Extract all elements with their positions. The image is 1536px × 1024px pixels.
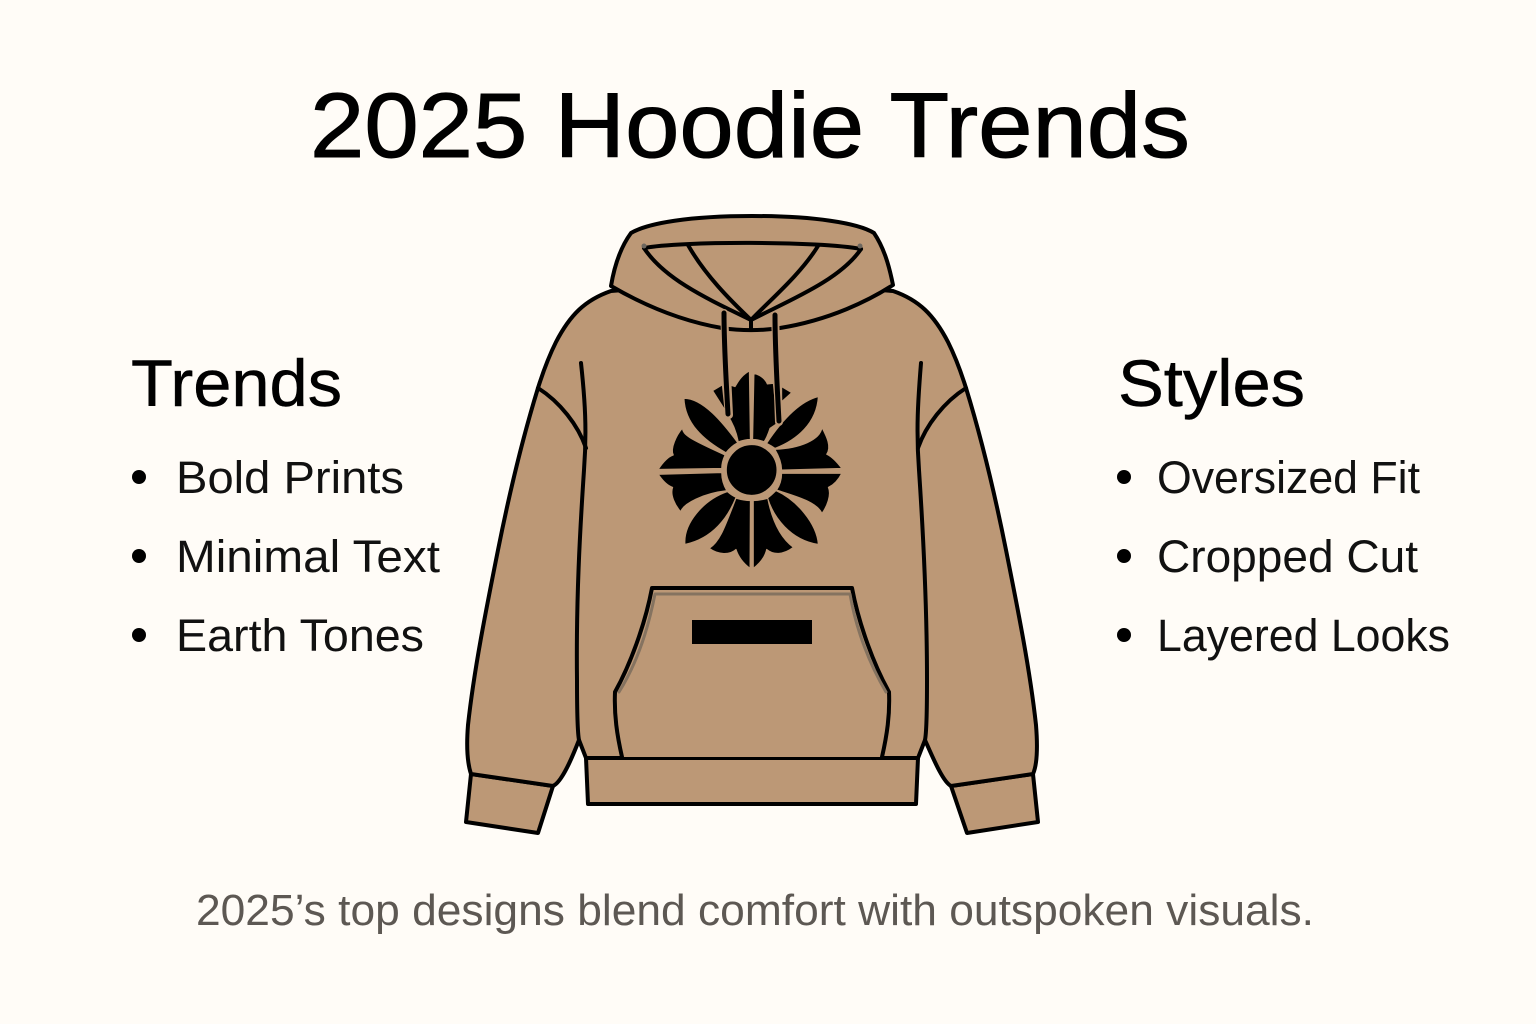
heading: trends: Trends xyxy=(131,346,342,420)
list item: layered looks: Layered Looks xyxy=(1157,610,1450,661)
hoodie illustration xyxy=(466,216,1038,833)
hood xyxy=(611,216,893,330)
list item: bold prints: Bold Prints xyxy=(176,452,404,503)
list item: earth tones: Earth Tones xyxy=(176,610,424,661)
caption: 2025’s top designs blend comfort with outspoken visuals. xyxy=(196,886,1314,935)
drawstring right xyxy=(775,315,779,422)
hood eyelet right xyxy=(858,244,862,248)
hem band xyxy=(586,758,918,804)
panel: styles xyxy=(1117,346,1450,661)
kangaroo pocket xyxy=(615,588,889,757)
hood opening xyxy=(644,243,861,329)
drawstring left line xyxy=(724,313,728,414)
title: 2025 Hoodie Trends xyxy=(310,75,1190,177)
graphic: flower print xyxy=(658,371,842,568)
left cuff xyxy=(466,774,553,833)
list item: cropped cut: Cropped Cut xyxy=(1157,531,1418,582)
right cuff xyxy=(951,774,1038,833)
drawstring right line xyxy=(775,315,779,421)
heading: styles: Styles xyxy=(1118,346,1305,420)
drawstring left xyxy=(724,313,729,415)
list item: minimal text: Minimal Text xyxy=(176,531,441,582)
left sleeve and body silhouette xyxy=(467,280,1037,786)
sleeve seams xyxy=(538,363,966,740)
hood eyelet left xyxy=(642,244,646,248)
pocket inner shading xyxy=(619,594,886,692)
panel: trends xyxy=(131,346,441,661)
list item: oversized fit: Oversized Fit xyxy=(1157,452,1420,503)
pocket black label xyxy=(692,620,812,644)
